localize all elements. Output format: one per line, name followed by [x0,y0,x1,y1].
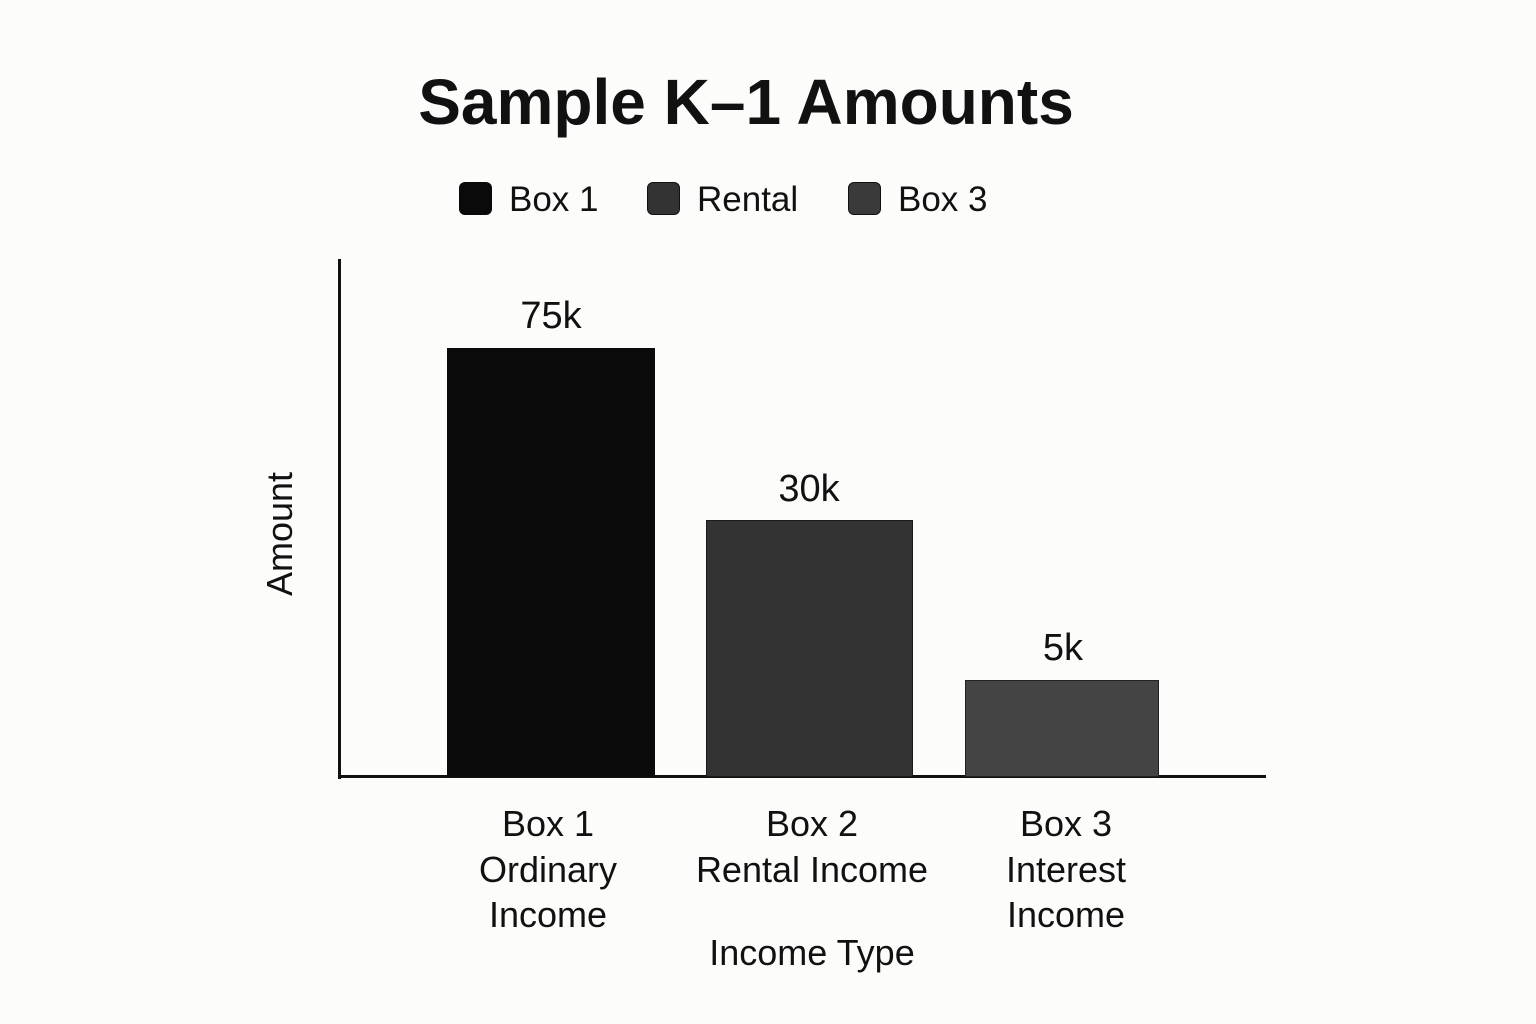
legend item: Rental: Rental [697,180,798,219]
chart axes [338,259,1266,779]
bar: Box 2 [706,520,913,777]
x label: Box 1: Income [489,894,607,935]
value label 30k: 30k [778,468,840,510]
legend item: Box 1 [459,180,598,219]
title: Sample K–1 Amounts [418,66,1074,138]
x label: Box 1 [479,803,617,935]
x label: Box 3: Interest [1006,848,1126,890]
legend item: Box 1: Box 1 [509,180,598,219]
x label: Box 2: Box 2 [766,803,858,844]
y axis label: Amount [259,472,300,596]
value label 5k: 5k [1043,627,1083,669]
bar: Box 3 [965,680,1159,777]
legend item: Box 3: Box 3 [898,180,988,219]
x label: Box 2: Rental Income [696,848,928,890]
x axis title: Income Type [709,932,915,973]
x label: Box 2 [696,803,928,890]
legend item: Box 3 [848,180,988,219]
legend item: Rental [647,180,798,219]
x label: Box 1: Box 1 [502,803,594,844]
x label: Box 3: Box 3 [1020,803,1112,844]
x label: Box 1: Ordinary [479,848,617,890]
legend [459,180,988,219]
bar: Box 1 [447,348,655,777]
x label: Box 3 [1006,803,1126,935]
x label: Box 3: Income [1007,894,1125,935]
value label 75k: 75k [520,295,582,337]
